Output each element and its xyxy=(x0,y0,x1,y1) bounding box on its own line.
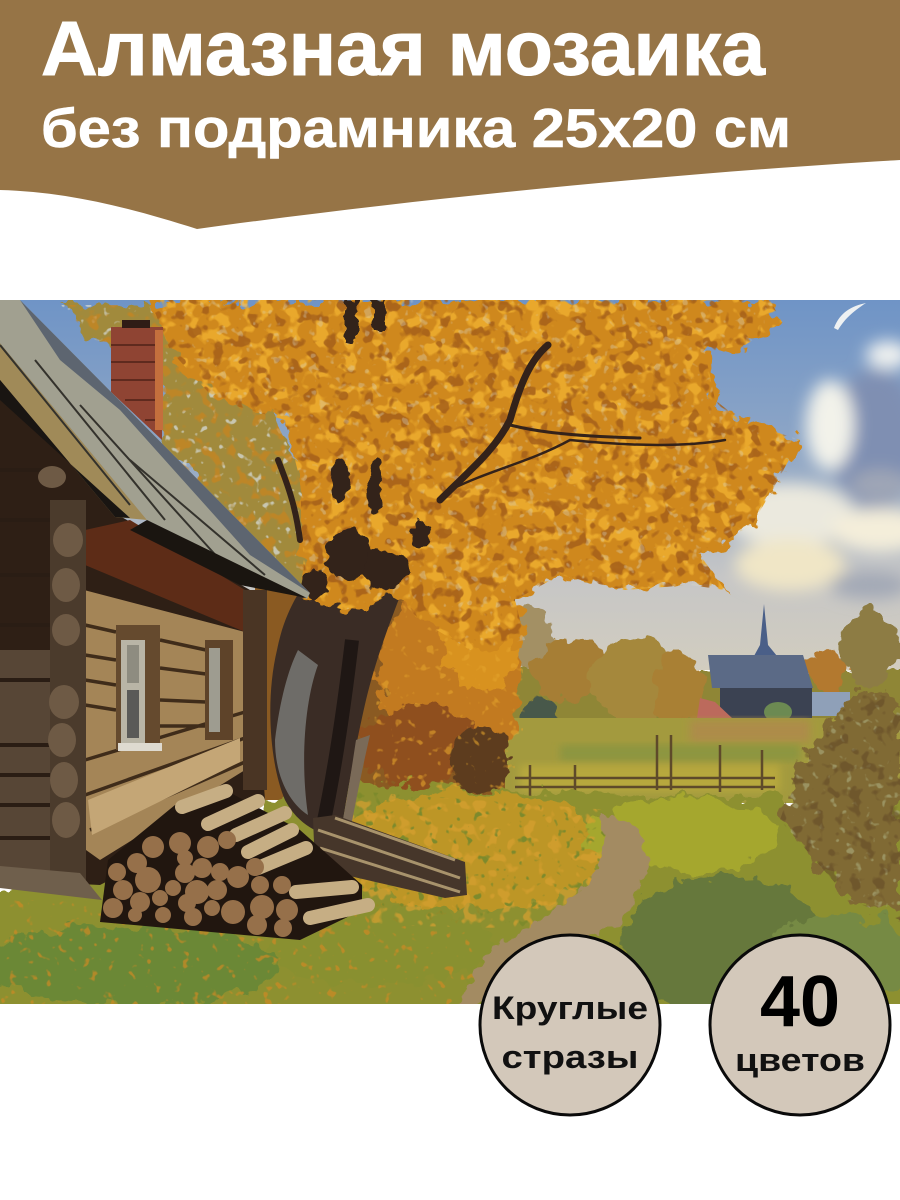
badge number: 40 xyxy=(760,962,840,1042)
dark round tree xyxy=(520,696,558,718)
corner logs xyxy=(50,500,86,880)
tree trunk xyxy=(270,592,399,830)
yellow leaves xyxy=(150,300,800,650)
backdrop behind trunk xyxy=(255,588,515,800)
lower left logs xyxy=(0,650,52,875)
right bush xyxy=(780,690,900,920)
dirt path xyxy=(458,815,647,1004)
badge: 40 colours xyxy=(710,935,890,1115)
log cabin xyxy=(0,375,267,900)
leaf texture xyxy=(365,600,525,790)
title: Алмазная мозаика xyxy=(41,6,766,92)
chimney xyxy=(111,320,163,440)
foreground grass xyxy=(0,775,900,1004)
distant tree line xyxy=(512,603,900,718)
olive foliage behind chimney xyxy=(60,305,320,590)
painting: autumn cabin scene xyxy=(0,300,900,1040)
badge text line 1: Круглые xyxy=(492,990,648,1026)
field and fence xyxy=(505,718,900,803)
cabin roof xyxy=(0,300,310,599)
leaves on grass xyxy=(0,790,610,1004)
log ends xyxy=(103,831,298,937)
badge caption: цветов xyxy=(735,1042,865,1078)
distant church xyxy=(697,604,850,722)
header banner xyxy=(0,0,900,229)
badge text line 2: стразы xyxy=(502,1039,638,1075)
dark shadow patches in canopy xyxy=(301,300,430,599)
cabin window left xyxy=(116,625,162,751)
cabin window right xyxy=(205,640,233,740)
foundation log xyxy=(0,866,102,900)
tree canopy xyxy=(150,300,800,650)
subtitle: без подрамника 25х20 см xyxy=(41,97,791,159)
woodpile xyxy=(100,790,368,940)
badge: round rhinestones xyxy=(480,935,660,1115)
lower orange tree xyxy=(360,585,525,795)
red upper logs xyxy=(85,520,245,632)
corner post xyxy=(243,590,267,790)
cloud wisp xyxy=(834,303,866,330)
light wall logs xyxy=(84,590,245,860)
stacked slabs by tree xyxy=(313,815,467,898)
tree branches xyxy=(278,345,725,540)
sky with clouds xyxy=(0,300,900,670)
sky gaps in leaves xyxy=(150,300,800,650)
dark russet leaves xyxy=(150,300,800,650)
split logs xyxy=(182,791,368,918)
